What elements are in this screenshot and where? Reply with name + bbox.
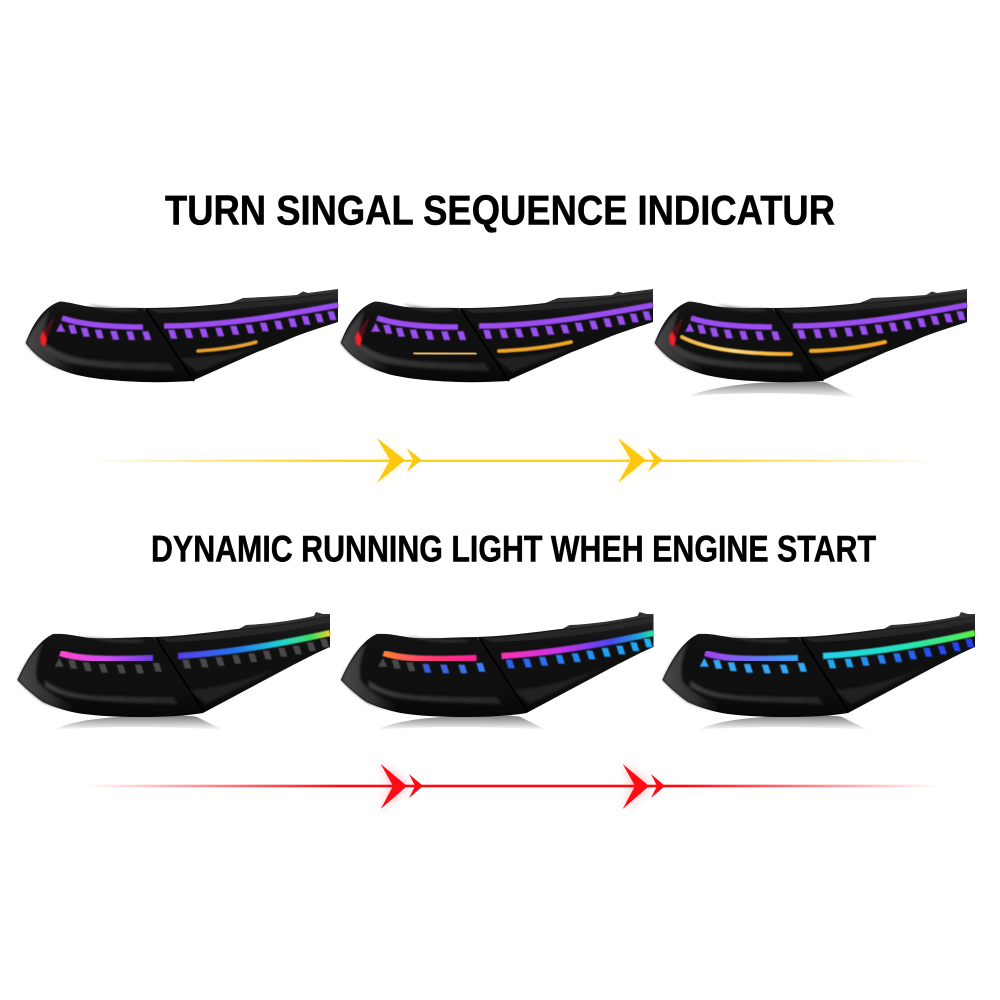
tail light 5: running light, orange to magenta: [341, 612, 654, 730]
reflection: [698, 716, 868, 730]
tail light 6: running light, violet to green: [662, 612, 975, 730]
tail light 2: turn signal second step: [341, 289, 653, 382]
reflection: [376, 716, 546, 730]
reflection: [53, 716, 223, 730]
title: turn signal: TURN SINGAL SEQUENCE INDICATUR: [165, 186, 835, 234]
reflection: [689, 381, 857, 398]
red sequence arrow: [85, 764, 940, 809]
tail light 3: turn signal third step: [655, 289, 967, 398]
tail light 4: running light, magenta to rainbow: [17, 612, 330, 730]
tail light 1: turn signal first step: [26, 289, 338, 382]
yellow sequence arrow: [85, 438, 940, 483]
